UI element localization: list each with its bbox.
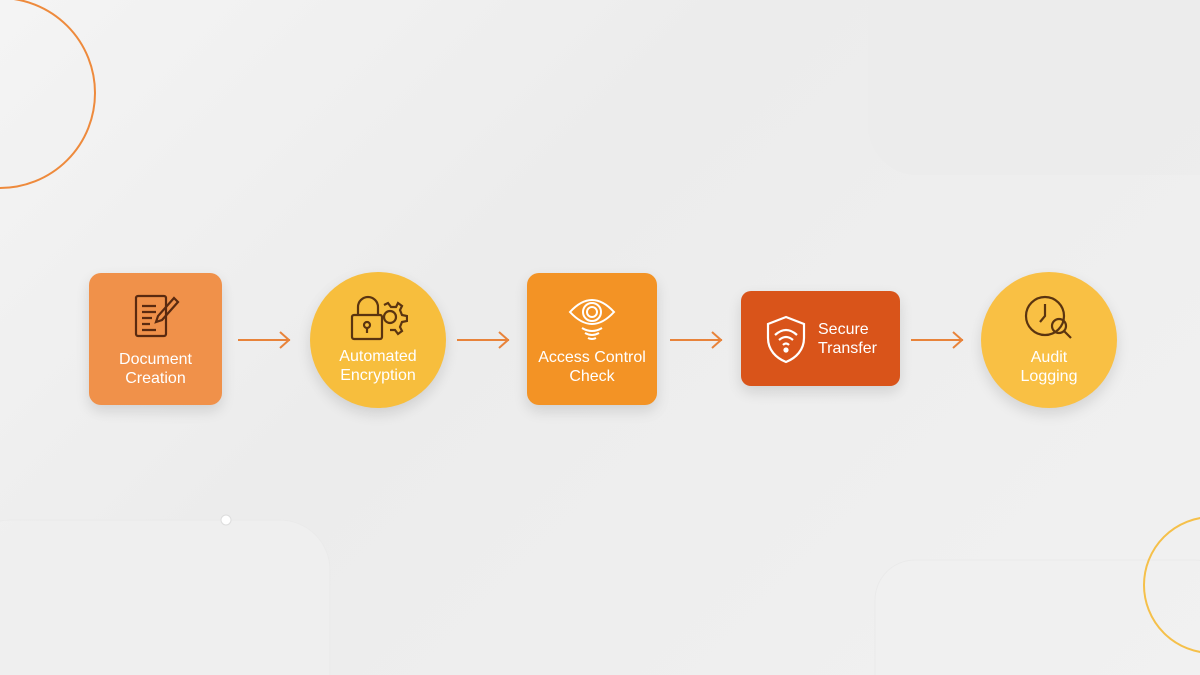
icon: clock magnifier [1024,296,1072,339]
step 1: Document Creation [89,273,222,405]
icon: document [134,294,180,338]
step 1: Document Creation: Document [119,351,192,368]
step 5: Audit Logging: Audit [1031,349,1067,366]
arrow 3 [670,331,722,349]
step 3: Access Control Check: Check [569,368,615,385]
step 4: Secure Transfer: Secure [818,320,869,338]
step 2: Automated Encryption [310,272,446,408]
icon: shield wifi [766,316,806,364]
arrow 2 [457,331,510,349]
arrow 1 [238,331,290,349]
step 5: Audit Logging [981,272,1117,408]
icon: lock and gear [350,296,408,340]
step 5: Audit Logging: Logging [1021,368,1077,385]
step 4: Secure Transfer: Transfer [818,340,877,356]
step 2: Automated Encryption: Encryption [340,367,416,384]
step 3: Access Control Check [527,273,657,405]
icon: eye fingerprint [568,299,616,340]
step 3: Access Control Check: Access Control [538,349,646,366]
step 2: Automated Encryption: Automated [339,348,417,365]
step 4: Secure Transfer [741,291,900,386]
step 1: Document Creation: Creation [125,370,186,387]
arrow 4 [911,331,964,349]
